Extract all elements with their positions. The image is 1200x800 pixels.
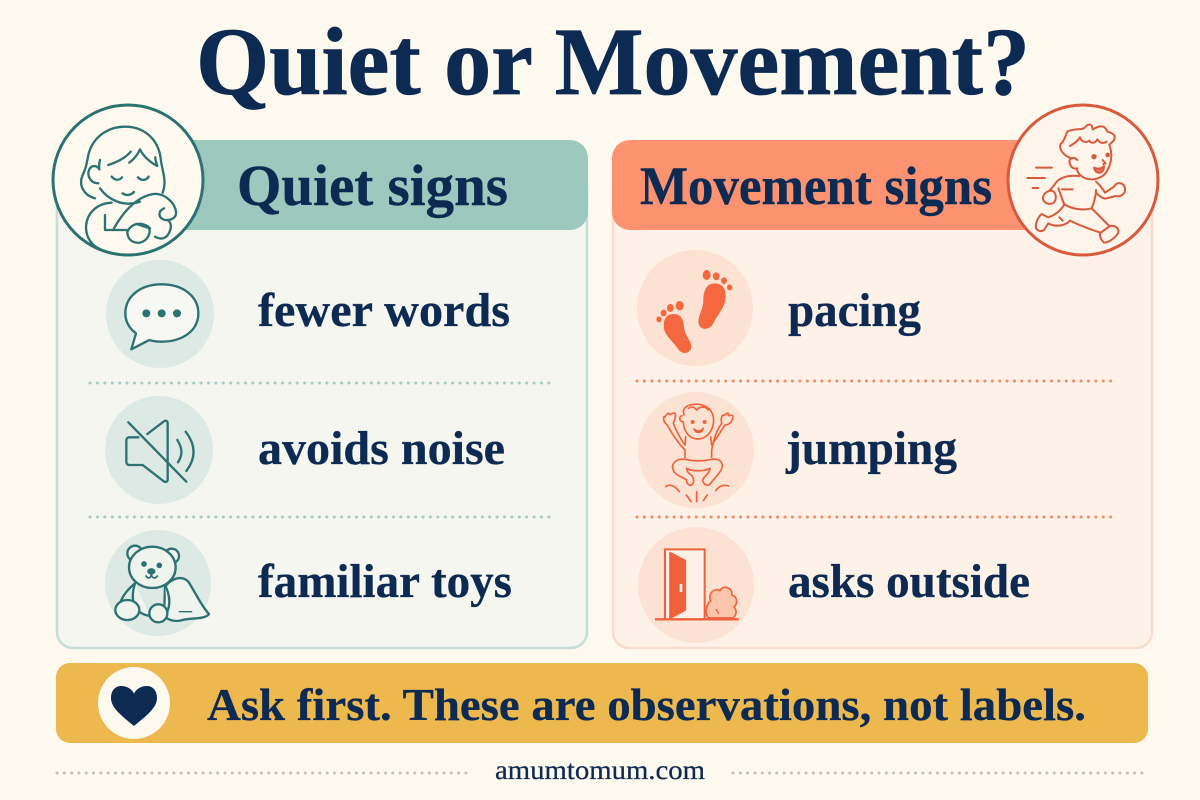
icon: jumping baby (664, 404, 733, 502)
row: avoids noise (105, 396, 505, 504)
callout: ask first banner (56, 663, 1148, 743)
movement heading: Movement signs (640, 156, 992, 216)
icon: speech bubble (125, 284, 198, 349)
movement header band (612, 140, 1040, 230)
row: jumping (638, 392, 957, 508)
label: avoids noise: avoids noise (258, 422, 505, 475)
label: pacing: pacing (788, 284, 921, 337)
label: familiar toys: familiar toys (258, 555, 512, 608)
row: pacing (637, 250, 921, 366)
quiet header band (150, 140, 588, 230)
icon: heart (111, 686, 157, 726)
label: asks outside: asks outside (788, 555, 1030, 608)
icon: footprints (656, 270, 732, 353)
row: familiar toys (105, 530, 512, 636)
panel: movement signs (612, 105, 1158, 648)
icon: open door and bush (655, 549, 739, 619)
label: jumping: jumping (785, 422, 957, 475)
panel: quiet signs (53, 105, 588, 648)
icon: teddy bear with blanket (115, 546, 209, 622)
label: fewer words: fewer words (258, 284, 510, 337)
icon: muted speaker (126, 421, 194, 482)
icon: sleeping child hugging a toy (53, 105, 203, 255)
title: Quiet or Movement? (196, 8, 1030, 115)
callout text: Ask first. These are observations, not labels. (207, 679, 1086, 730)
quiet heading: Quiet signs (237, 153, 508, 218)
movement panel body (613, 170, 1152, 648)
row: asks outside (638, 527, 1030, 643)
quiet panel body (57, 170, 587, 648)
icon: running child (1008, 105, 1158, 255)
website url: amumtomum.com (495, 755, 705, 785)
row: fewer words (106, 260, 510, 368)
